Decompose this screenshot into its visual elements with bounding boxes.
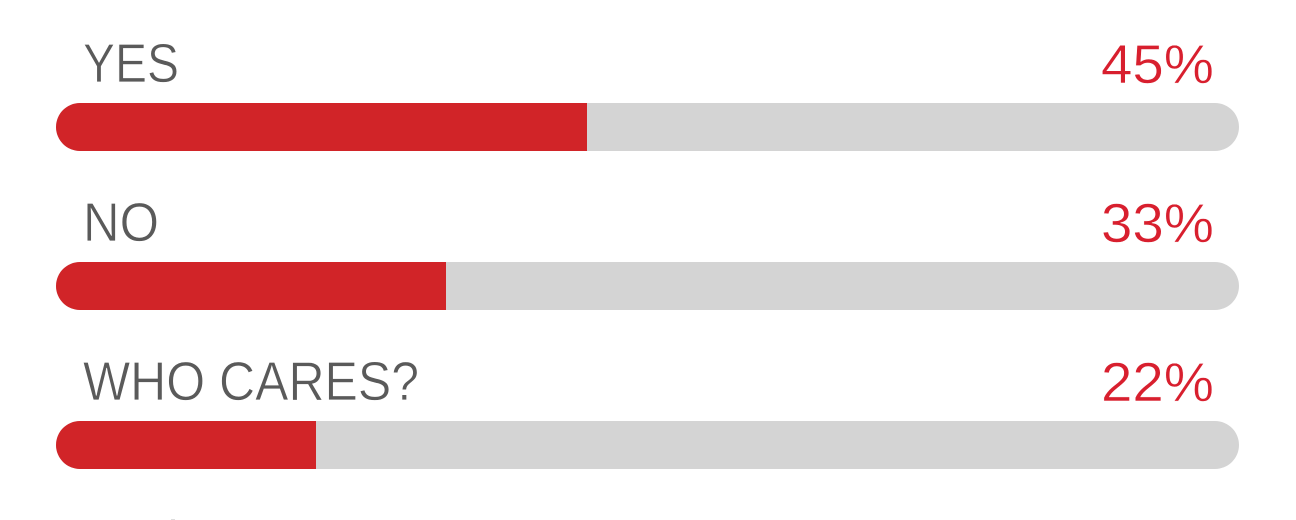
bar: NO 33% (56, 262, 1239, 310)
row: YES 45% (56, 44, 1239, 151)
label: WHO CARES?: WHO CARES? (83, 350, 419, 412)
label: YES: YES (83, 32, 179, 94)
value: 33%: 33% (1101, 192, 1214, 254)
row: WHO CARES? 22% (56, 362, 1239, 469)
value: 22%: 22% (1101, 351, 1214, 413)
label: NO: NO (83, 191, 159, 253)
bar: YES 45% (56, 103, 1239, 151)
bar: WHO CARES? 22% (56, 421, 1239, 469)
row: NO 33% (56, 203, 1239, 310)
value: 45%: 45% (1101, 33, 1214, 95)
